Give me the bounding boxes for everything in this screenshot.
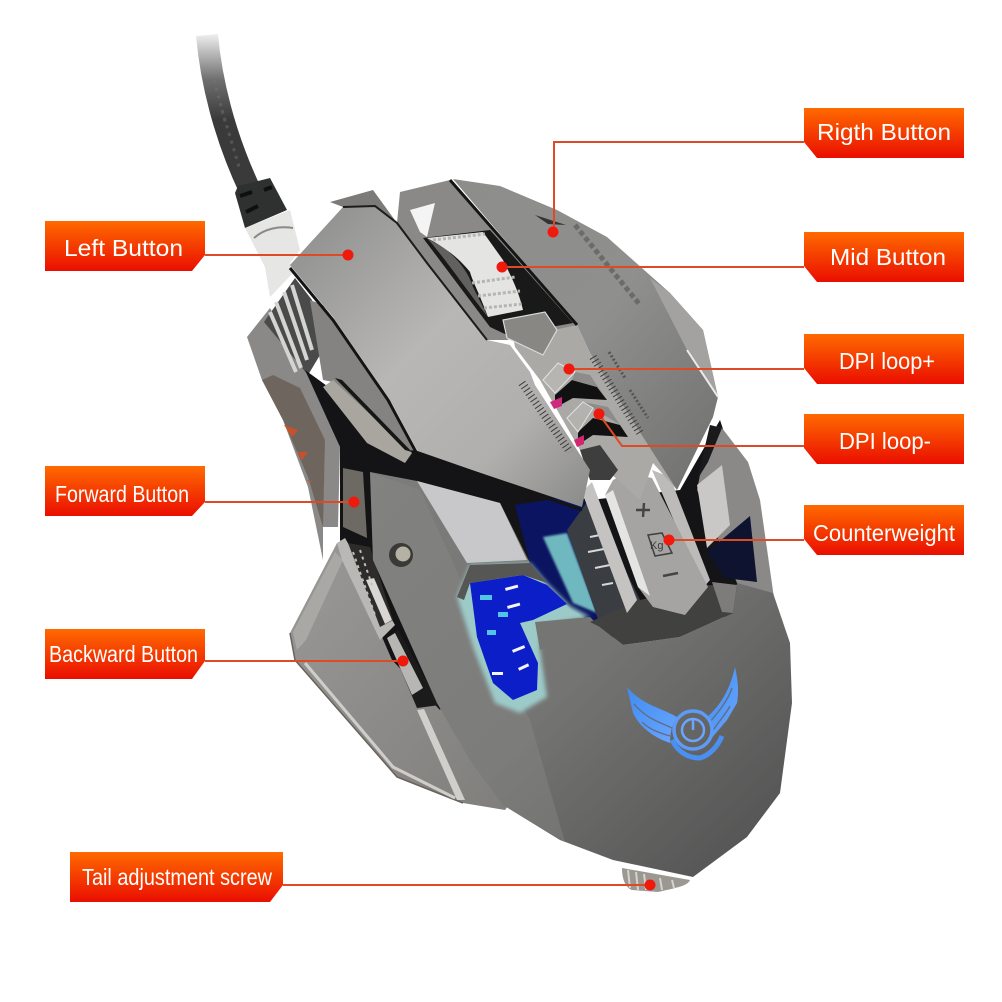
counterweight button: Kg xyxy=(650,540,663,552)
label: Tail adjustment screw: Tail adjustment screw xyxy=(82,864,273,890)
blue glow vent xyxy=(457,563,600,713)
centre stripe xyxy=(510,320,677,500)
cooling fins xyxy=(264,278,320,375)
right button plate xyxy=(453,179,718,490)
label: DPI loop- xyxy=(594,408,964,464)
side screw xyxy=(389,543,413,567)
label: Counterweight: Counterweight xyxy=(813,520,955,546)
label: Rigth Button: Rigth Button xyxy=(817,119,951,145)
side button column xyxy=(337,538,395,640)
icon: braided cable xyxy=(207,35,300,297)
counterweight side strips xyxy=(582,482,637,613)
DPI loop+ button xyxy=(543,363,607,409)
left button plate xyxy=(290,206,590,507)
rear stub behind left button xyxy=(330,190,397,223)
lower side wing xyxy=(290,540,520,810)
label: DPI loop-: DPI loop- xyxy=(839,428,931,454)
palm shell xyxy=(370,472,792,877)
counterweight button xyxy=(605,473,708,615)
label: DPI loop+: DPI loop+ xyxy=(839,348,935,374)
icon: wing power logo xyxy=(627,667,738,758)
shell left facet xyxy=(370,472,565,842)
mouse illustration xyxy=(207,35,792,892)
dark body under plates xyxy=(305,370,770,710)
label: Rigth Button xyxy=(548,108,964,238)
wheel lower guard xyxy=(503,312,557,355)
label: Backward Button xyxy=(45,629,408,679)
label: Forward Button: Forward Button xyxy=(55,481,189,507)
wheel housing frame xyxy=(397,180,577,340)
rear side bracket xyxy=(247,308,340,560)
label: Left Button xyxy=(45,221,354,271)
left side trim xyxy=(310,300,415,463)
shell white facet xyxy=(417,481,527,563)
tail adjustment screw xyxy=(622,868,690,892)
forward button xyxy=(343,468,367,538)
label: Left Button: Left Button xyxy=(64,235,183,261)
blue vent strip and fins xyxy=(515,495,640,627)
label: Tail adjustment screw xyxy=(70,852,656,902)
scroll wheel xyxy=(427,232,523,317)
label: Mid Button xyxy=(496,232,964,282)
label: Counterweight xyxy=(664,505,964,555)
backward button xyxy=(387,630,440,708)
label: Backward Button: Backward Button xyxy=(49,641,198,667)
dark recess below cap xyxy=(590,585,737,645)
label: Mid Button: Mid Button xyxy=(830,244,946,270)
label: DPI loop+ xyxy=(564,334,964,384)
label: Forward Button xyxy=(45,466,360,516)
right side piece xyxy=(697,425,774,598)
DPI loop- button xyxy=(567,402,628,447)
